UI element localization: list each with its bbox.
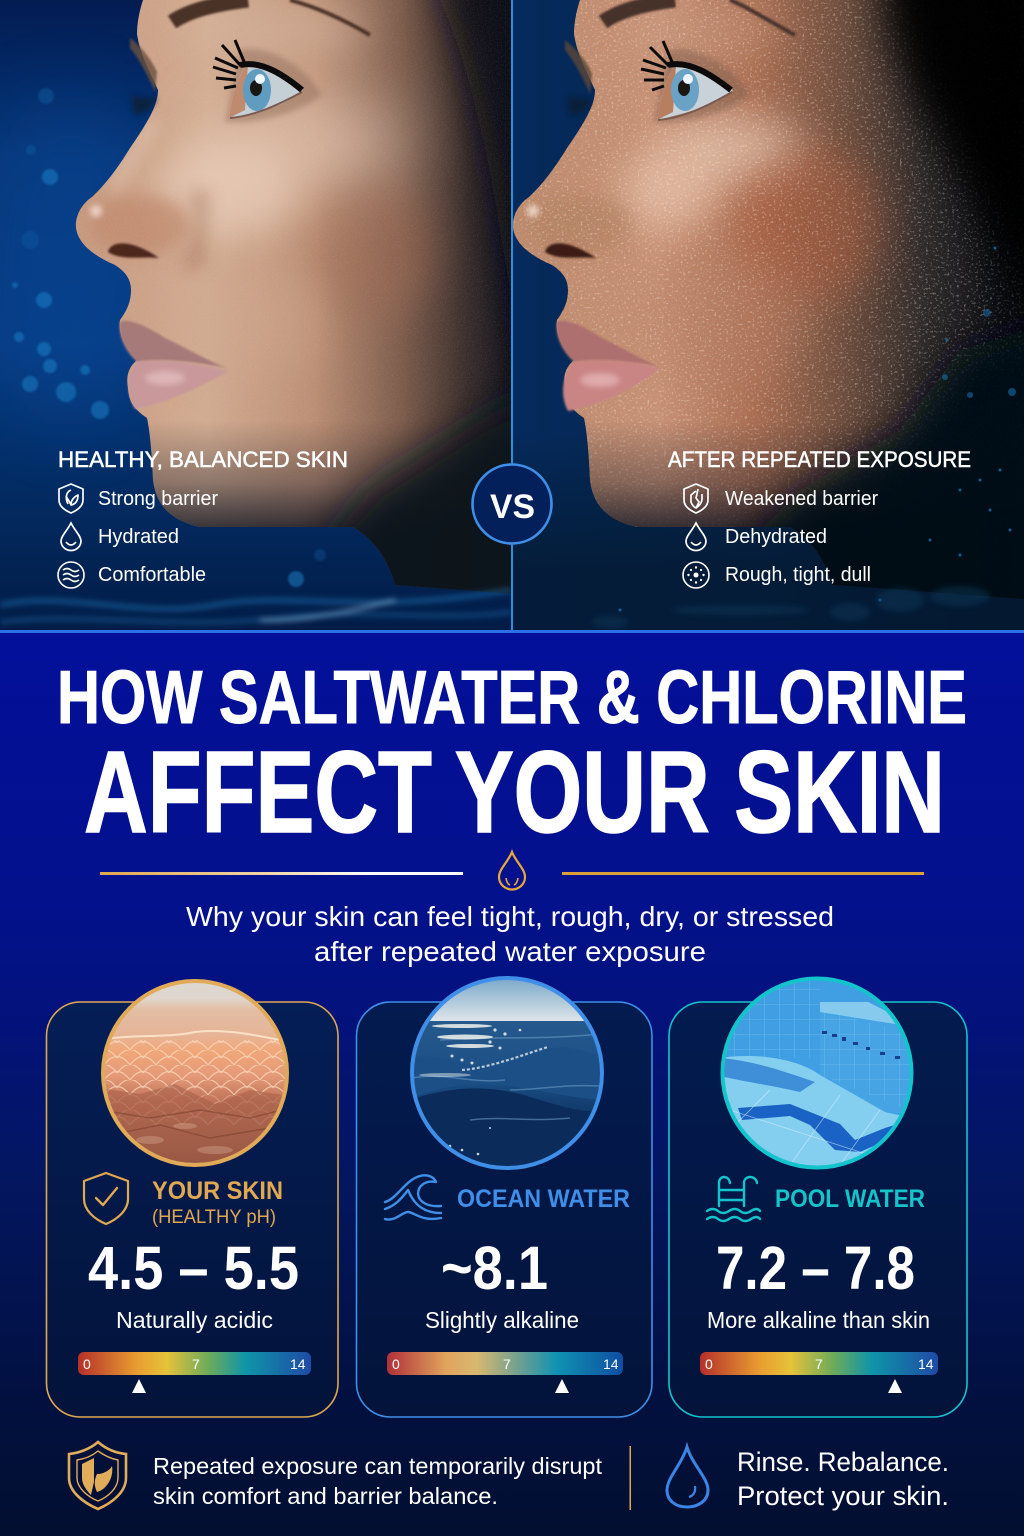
- ph scale: 0: [705, 1356, 713, 1372]
- value: skin ph: 4.5 – 5.5: [88, 1234, 299, 1302]
- panel: ocean water: [356, 978, 652, 1417]
- icon: gold leaf shield: [69, 1442, 126, 1509]
- label: weakened barrier: Weakened barrier: [725, 488, 878, 510]
- value: ocean ph: ~8.1: [441, 1234, 548, 1302]
- title: [57, 655, 967, 857]
- far eye and brow: [565, 40, 592, 94]
- water droplets: [618, 246, 1016, 612]
- photo: ocean: [410, 978, 610, 1171]
- lips: [557, 321, 660, 411]
- heading: ocean water: OCEAN WATER: [457, 1185, 630, 1213]
- ph scale: 7: [192, 1356, 200, 1372]
- eye: [213, 40, 322, 122]
- description: Naturally acidic: [116, 1307, 273, 1333]
- icon: droplet: [686, 523, 706, 550]
- ph scale: 0: [83, 1356, 91, 1372]
- healthy skin labels: [58, 447, 348, 588]
- label: comfortable: Comfortable: [98, 564, 206, 586]
- nostril: [108, 243, 159, 258]
- ph scale: [700, 1352, 938, 1393]
- icon: rough particles: [683, 562, 709, 588]
- ph scale: [78, 1352, 311, 1393]
- subtitle: Why your skin can feel tight, rough, dry, or stressed: [186, 901, 834, 932]
- description: Slightly alkaline: [425, 1307, 579, 1333]
- exposed face: [513, 0, 1024, 599]
- ph scale: [387, 1352, 623, 1393]
- icon: wave: [385, 1175, 441, 1220]
- label: rough tight dull: Rough, tight, dull: [725, 564, 871, 586]
- ph scale: 7: [815, 1356, 823, 1372]
- vs badge: VS: [490, 488, 535, 526]
- description: More alkaline than skin: [707, 1307, 930, 1333]
- icon: pool ladder: [707, 1177, 760, 1221]
- heading: pool water: POOL WATER: [775, 1185, 925, 1213]
- icon: droplet: [61, 523, 81, 550]
- ph scale: 14: [918, 1356, 934, 1372]
- ph scale: 14: [290, 1356, 306, 1372]
- panel: damaged skin photo: [500, 0, 1024, 650]
- eye: [641, 41, 750, 122]
- footer: [69, 1442, 949, 1511]
- label: dehydrated: Dehydrated: [725, 526, 827, 548]
- icon: leaf shield: [59, 484, 83, 513]
- page background: [0, 632, 1024, 1536]
- panel: healthy skin photo: [0, 0, 511, 630]
- ph scale: 0: [392, 1356, 400, 1372]
- text: rinse tagline: Protect your skin.: [737, 1481, 949, 1511]
- healthy face: [76, 0, 511, 594]
- ph scale: 7: [503, 1356, 511, 1372]
- text: exposure note: [153, 1453, 603, 1509]
- heading: after exposure: AFTER REPEATED EXPOSURE: [668, 447, 971, 472]
- text: exposure note: skin comfort and barrier balance.: [153, 1483, 498, 1509]
- icon: calm waves: [58, 562, 84, 588]
- heading: healthy skin: HEALTHY, BALANCED SKIN: [58, 447, 348, 472]
- vs badge: [472, 464, 552, 544]
- text: exposure note: Repeated exposure can temporarily disrupt: [153, 1453, 603, 1479]
- brows: [603, 0, 795, 35]
- divider lines: [0, 0, 1024, 633]
- water ripples: [0, 590, 511, 622]
- value: pool ph: 7.2 – 7.8: [716, 1234, 915, 1302]
- title divider with droplet: [100, 852, 924, 889]
- label: strong barrier: Strong barrier: [98, 488, 218, 510]
- label: hydrated: Hydrated: [98, 526, 179, 548]
- text: rinse tagline: Rinse. Rebalance.: [737, 1447, 949, 1477]
- brows: [172, 0, 370, 35]
- panel: pool water: [669, 978, 967, 1417]
- icon: shield check: [84, 1173, 128, 1224]
- icon: blue droplet: [667, 1447, 708, 1507]
- after exposure labels: [668, 447, 971, 588]
- subheading: healthy ph: (HEALTHY pH): [152, 1207, 276, 1228]
- subtitle: [186, 901, 834, 967]
- far eye and brow: [130, 38, 157, 92]
- ph scale: 14: [603, 1356, 619, 1372]
- subtitle: after repeated water exposure: [314, 936, 706, 967]
- photo: pool: [720, 978, 920, 1170]
- panel: your skin: [46, 978, 338, 1417]
- text: rinse tagline: [737, 1447, 949, 1511]
- heading: your skin: YOUR SKIN: [152, 1177, 283, 1205]
- photo: skin layers: [100, 978, 290, 1168]
- icon: weakened shield: [684, 484, 708, 513]
- lips: [120, 321, 228, 409]
